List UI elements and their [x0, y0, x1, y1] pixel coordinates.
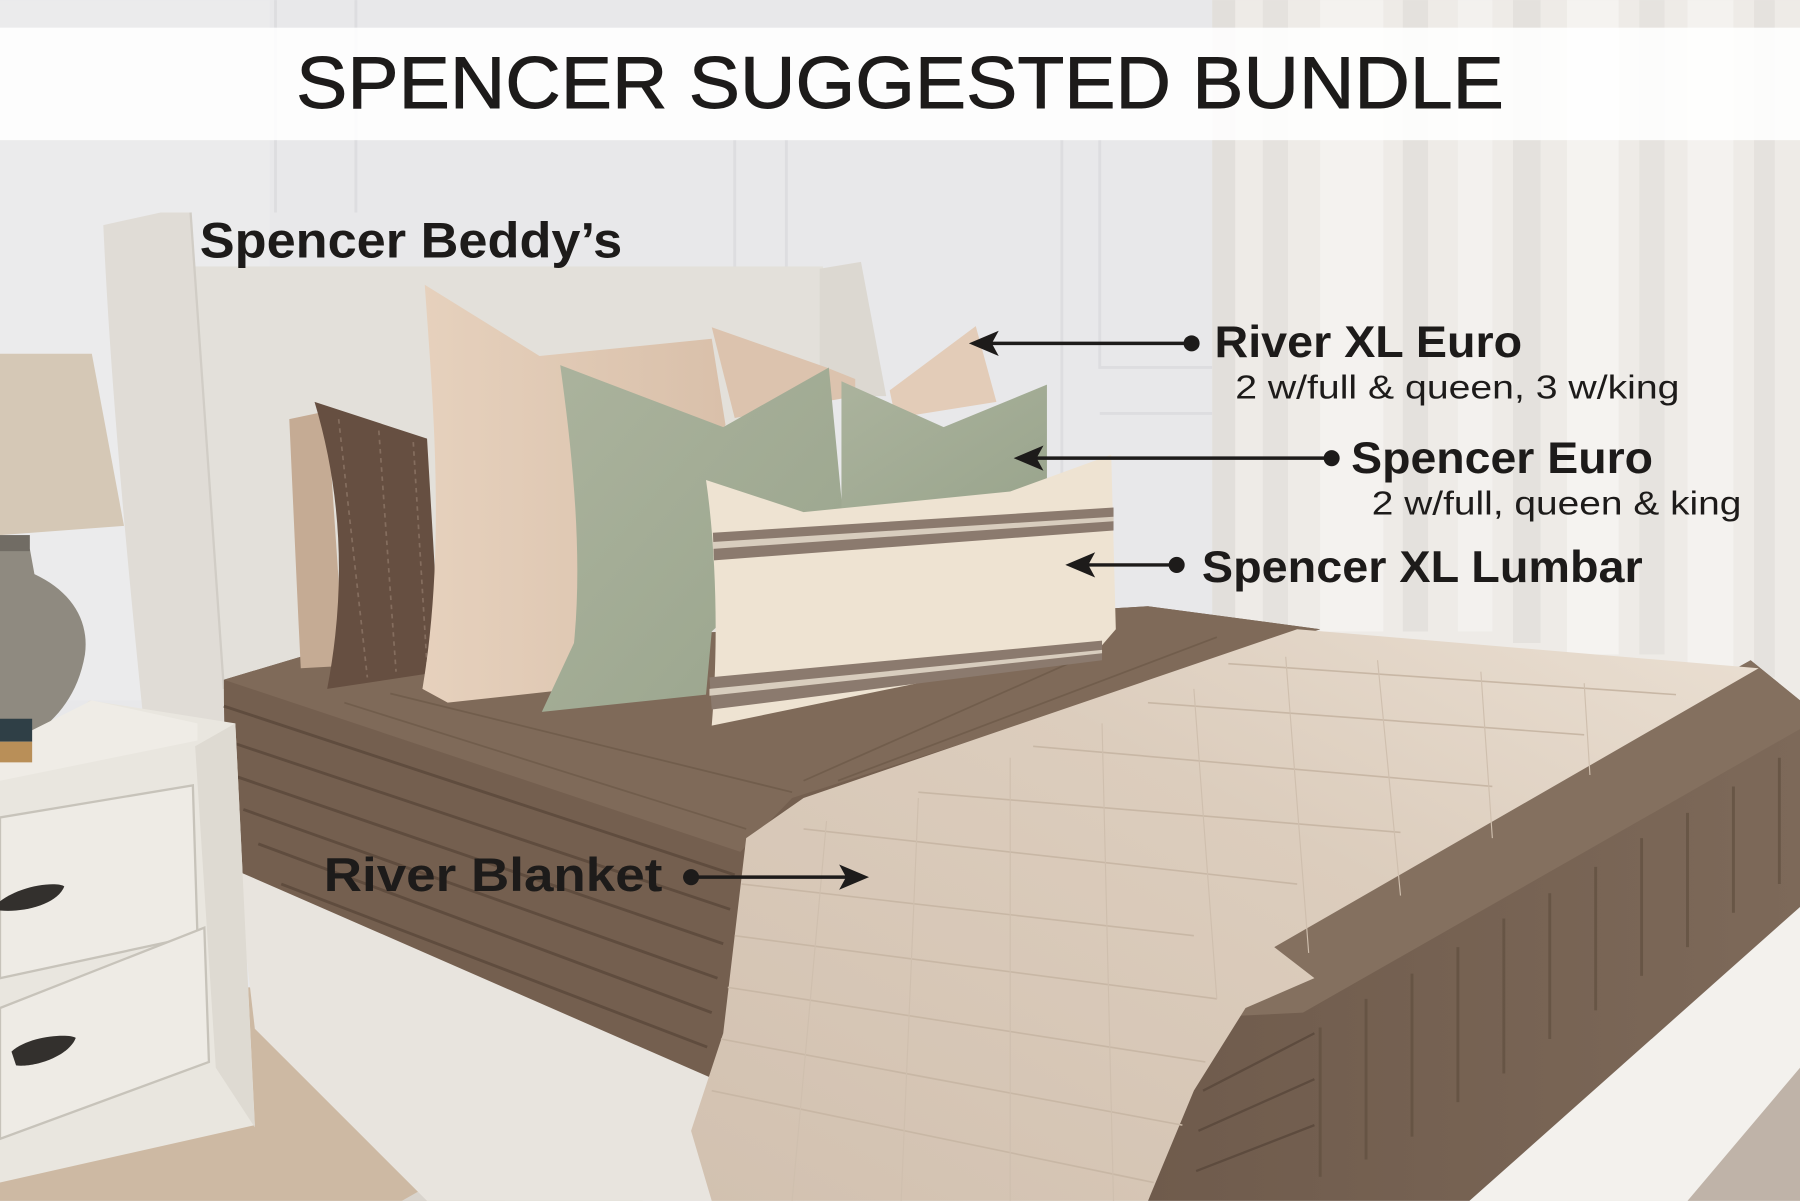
arrow: River XL Euro [969, 331, 1200, 356]
arrow: River Blanket [683, 865, 869, 890]
arrow: Spencer Euro [1014, 446, 1340, 471]
label: Spencer Euro [1351, 433, 1741, 522]
label: River XL Euro: River XL Euro [1215, 317, 1522, 367]
blanket: River Blanket [691, 629, 1759, 1201]
arrow: Spencer XL Lumbar [1065, 552, 1185, 578]
mattress: brown zippered cover, left side and top [224, 606, 1320, 1091]
pillow: River XL Euro back [422, 285, 996, 703]
curtain [1212, 0, 1800, 700]
headboard [103, 212, 886, 726]
label: River XL Euro [1215, 317, 1679, 406]
pillow: Spencer Beddy's sham, back [289, 402, 441, 689]
bed frame [235, 861, 1800, 1201]
header band [0, 28, 1800, 140]
title: SPENCER SUGGESTED BUNDLE [296, 41, 1504, 124]
label: Spencer Euro: Spencer Euro [1351, 433, 1653, 483]
mattress: brown zippered cover, right side [1148, 660, 1800, 1201]
pillow: Spencer XL Lumbar [706, 455, 1116, 726]
label: River Blanket: River Blanket [324, 848, 663, 901]
pillows: Spencer Euro green [542, 365, 1047, 712]
floor [0, 987, 643, 1201]
label: Spencer XL Lumbar: Spencer XL Lumbar [1202, 542, 1643, 592]
label: River XL Euro: 2 w/full & queen, 3 w/king [1235, 369, 1679, 406]
label: Spencer Beddy's: Spencer Beddy’s [200, 211, 622, 268]
label: Spencer Euro: 2 w/full, queen & king [1372, 485, 1741, 522]
nightstand [0, 700, 255, 1183]
lamp [0, 354, 124, 735]
